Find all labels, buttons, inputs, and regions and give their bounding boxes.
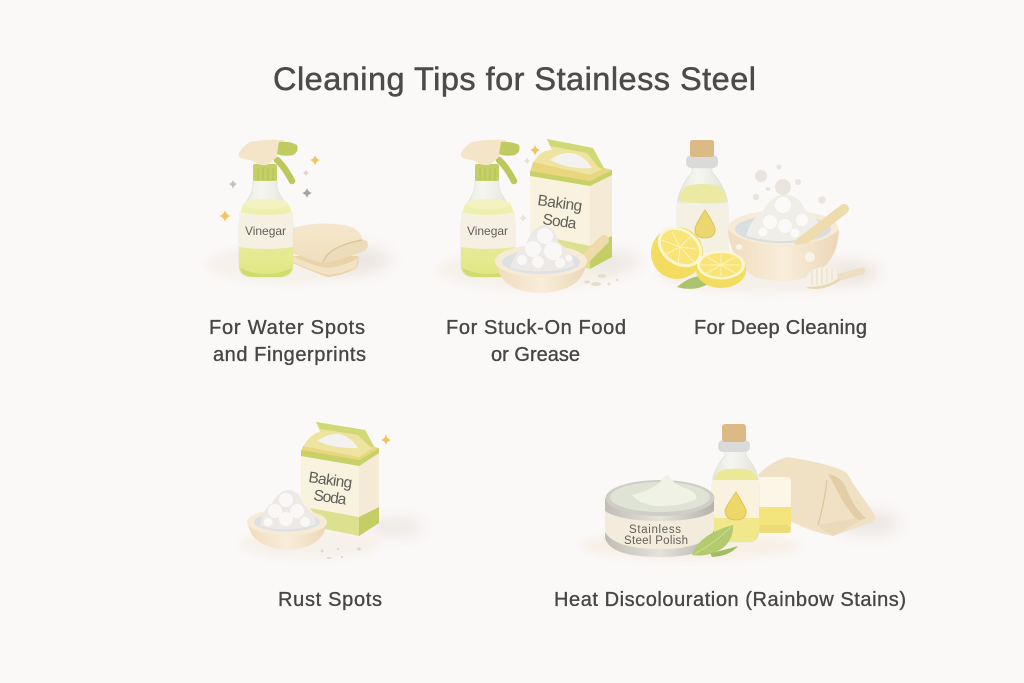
powder bbox=[317, 434, 358, 448]
ground shadow bbox=[206, 244, 391, 284]
label: stuck-on food: For Stuck-On Food bbox=[446, 317, 626, 339]
icon: foam bbox=[746, 164, 826, 241]
ground shadow bbox=[657, 254, 879, 294]
icon: lemon half front bbox=[696, 250, 746, 288]
glass bbox=[677, 168, 728, 252]
open flap edge bbox=[547, 139, 605, 170]
ground shadow bbox=[240, 518, 423, 559]
icon: mixing bowl bbox=[728, 209, 844, 281]
powder bbox=[550, 153, 592, 168]
flap interior bbox=[533, 139, 605, 177]
icon: lemon half back bbox=[650, 218, 710, 279]
icon: folded towels bbox=[293, 224, 368, 277]
band bottom bbox=[552, 238, 590, 269]
icon: bowl interior bbox=[728, 210, 838, 246]
label bbox=[239, 212, 293, 249]
icon: scrub brush bbox=[806, 267, 862, 289]
trigger lever bbox=[277, 160, 292, 181]
label: rust spots: Rust Spots bbox=[278, 589, 382, 611]
label: water spots bbox=[209, 317, 366, 366]
icon: sparkles bbox=[219, 155, 320, 222]
oil bottom bbox=[712, 518, 759, 542]
tin text: Stainless bbox=[629, 524, 681, 536]
side face bbox=[590, 170, 612, 269]
liquid bbox=[239, 200, 293, 277]
icon: baking soda box bbox=[530, 139, 612, 269]
label: deep cleaning: For Deep Cleaning bbox=[694, 317, 867, 339]
front face bbox=[530, 172, 590, 269]
collar bbox=[686, 155, 718, 168]
icon: baking soda box bbox=[301, 422, 379, 536]
bowl front bbox=[728, 229, 839, 281]
panel: rust spots bbox=[240, 422, 423, 559]
lip band bbox=[301, 448, 379, 466]
icon: polish tin bbox=[605, 475, 714, 557]
open flap edge bbox=[316, 422, 375, 448]
side face bbox=[359, 448, 379, 536]
icon: sparkles bbox=[519, 145, 540, 222]
icon: vinegar spray bottle bbox=[461, 140, 520, 277]
icon: sparkle bbox=[381, 434, 391, 445]
flap interior bbox=[303, 422, 375, 457]
ground shadow bbox=[580, 511, 900, 560]
box text: Baking bbox=[536, 192, 583, 215]
oil top bbox=[714, 468, 758, 482]
tin label bbox=[605, 511, 714, 549]
panel: deep cleaning bbox=[650, 140, 879, 294]
bottle glass bbox=[239, 180, 293, 277]
spray head bbox=[239, 140, 284, 165]
icon: folded cloth bbox=[758, 457, 875, 536]
icon: bowl with paste bbox=[495, 225, 604, 293]
drop bbox=[725, 492, 746, 520]
collar bbox=[253, 164, 277, 181]
label: heat discolouration: Heat Discolouration (Rainbow Stains) bbox=[554, 589, 906, 611]
label: water spots: For Water Spots bbox=[209, 317, 365, 339]
title: Cleaning Tips for Stainless Steel bbox=[273, 61, 756, 97]
icon: bowl with soda bbox=[247, 490, 327, 550]
oil bbox=[679, 184, 727, 204]
box rim bbox=[301, 446, 379, 460]
panel: heat discolouration bbox=[580, 424, 900, 560]
label bbox=[712, 480, 759, 518]
label text: Vinegar bbox=[245, 224, 286, 238]
paste bbox=[510, 225, 575, 272]
icon: leaf bbox=[677, 276, 708, 289]
label: water spots: and Fingerprints bbox=[213, 344, 366, 366]
drop bbox=[695, 210, 715, 238]
label: stuck-on food bbox=[446, 317, 626, 366]
panel: stuck-on food or grease bbox=[438, 139, 640, 293]
wooden spatula bbox=[800, 209, 844, 243]
icon: spilled powder bbox=[584, 274, 618, 286]
glass bbox=[712, 451, 759, 542]
icon: vinegar spray bottle bbox=[239, 140, 298, 277]
spoon handle bbox=[586, 240, 604, 258]
label bbox=[677, 202, 728, 252]
box rim bbox=[530, 162, 612, 181]
tin body bbox=[605, 498, 714, 557]
icon: oil bottle bbox=[677, 140, 728, 252]
band top bbox=[530, 170, 612, 186]
label text: Vinegar bbox=[467, 224, 508, 238]
collar bbox=[718, 440, 750, 452]
icon: spilled powder bbox=[320, 547, 361, 559]
band bottom bbox=[310, 508, 359, 536]
label: stuck-on food: or Grease bbox=[491, 344, 580, 366]
cork bbox=[690, 140, 714, 157]
bowl body bbox=[496, 262, 587, 293]
icon: oil bottle bbox=[712, 424, 759, 542]
rim bbox=[606, 480, 714, 516]
box text: Soda bbox=[541, 211, 578, 233]
cream bbox=[632, 475, 696, 506]
box text: Baking bbox=[307, 469, 353, 492]
icon: soap bar bbox=[758, 477, 791, 533]
box text: Soda bbox=[312, 487, 348, 509]
cork bbox=[722, 424, 746, 442]
ground shadow bbox=[438, 250, 640, 290]
tin text: Steel Polish bbox=[624, 535, 688, 547]
front face bbox=[301, 452, 359, 536]
panel: water spots and fingerprints bbox=[206, 140, 391, 284]
icon: leaves bbox=[692, 525, 738, 557]
